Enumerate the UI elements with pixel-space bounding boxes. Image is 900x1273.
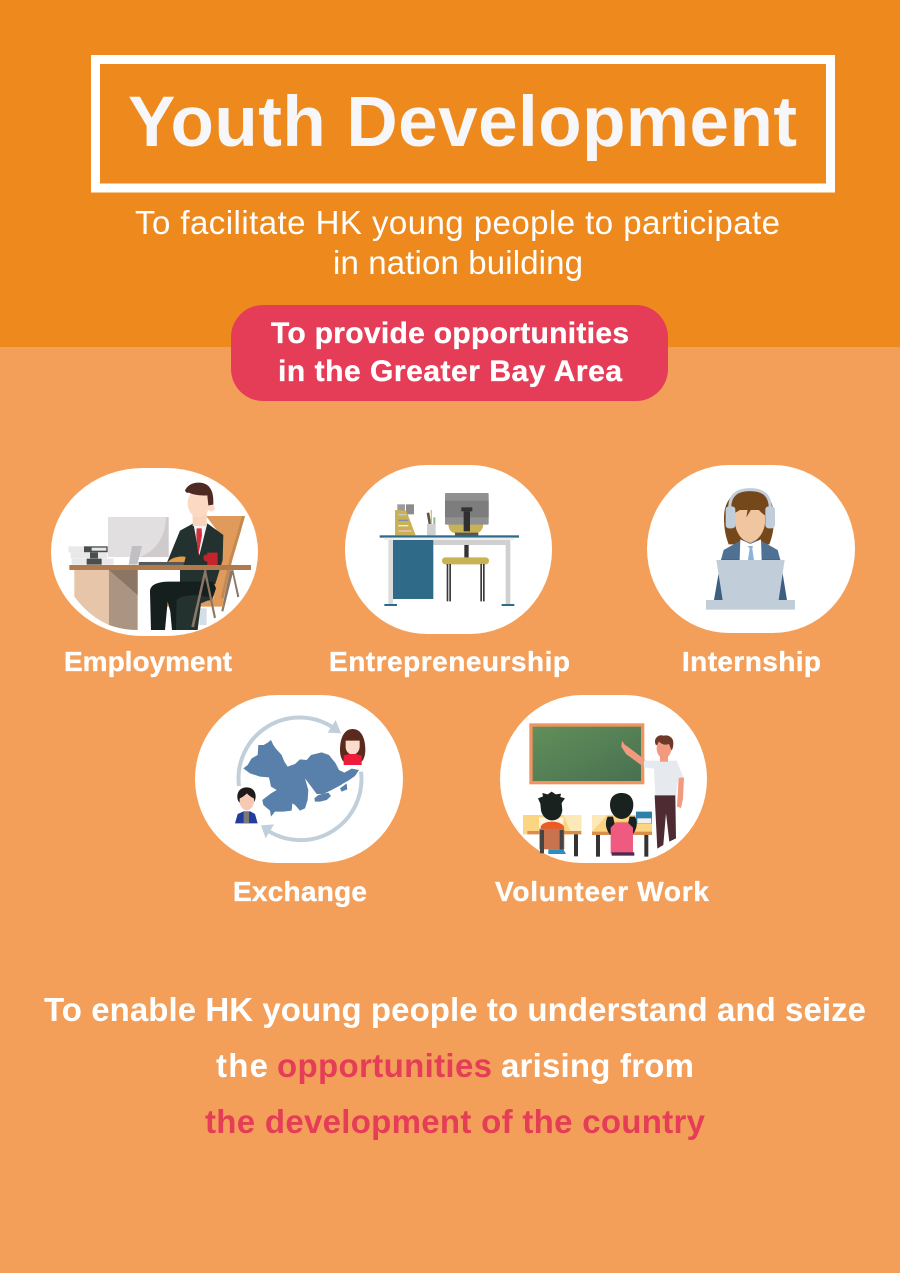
label: exchange: Exchange (233, 876, 367, 907)
subtitle (135, 204, 780, 281)
callout pill: To provide opportunities (271, 317, 629, 350)
closing statement: To enable HK young people to understand and seize (44, 991, 866, 1028)
icon: map with people (235, 718, 365, 840)
closing statement: the (216, 1047, 268, 1084)
subtitle: To facilitate HK young people to participate (135, 204, 780, 241)
panel: internship (647, 465, 855, 677)
closing statement: arising from (501, 1047, 694, 1084)
callout pill: in the Greater Bay Area (278, 355, 622, 388)
subtitle: in nation building (333, 244, 583, 281)
label: internship: Internship (682, 646, 821, 677)
title: Youth Development (128, 83, 797, 162)
icon: classroom (523, 723, 684, 857)
panel: entrepreneurship (329, 465, 570, 677)
panel: volunteer work (495, 695, 709, 907)
closing statement: the development of the country (205, 1103, 706, 1140)
icon: woman with headset (706, 489, 795, 610)
icon: office desk (380, 493, 519, 606)
closing statement: opportunities (277, 1047, 492, 1084)
label: entrepreneurship: Entrepreneurship (329, 646, 570, 677)
panel: exchange (195, 695, 403, 907)
closing statement (44, 991, 866, 1140)
header band (0, 0, 900, 347)
label: volunteer work: Volunteer Work (495, 876, 709, 907)
callout pill (231, 305, 668, 401)
panel: employment (51, 468, 258, 677)
label: employment: Employment (64, 646, 232, 677)
icon: man at desk (68, 483, 251, 630)
title frame (96, 60, 830, 188)
